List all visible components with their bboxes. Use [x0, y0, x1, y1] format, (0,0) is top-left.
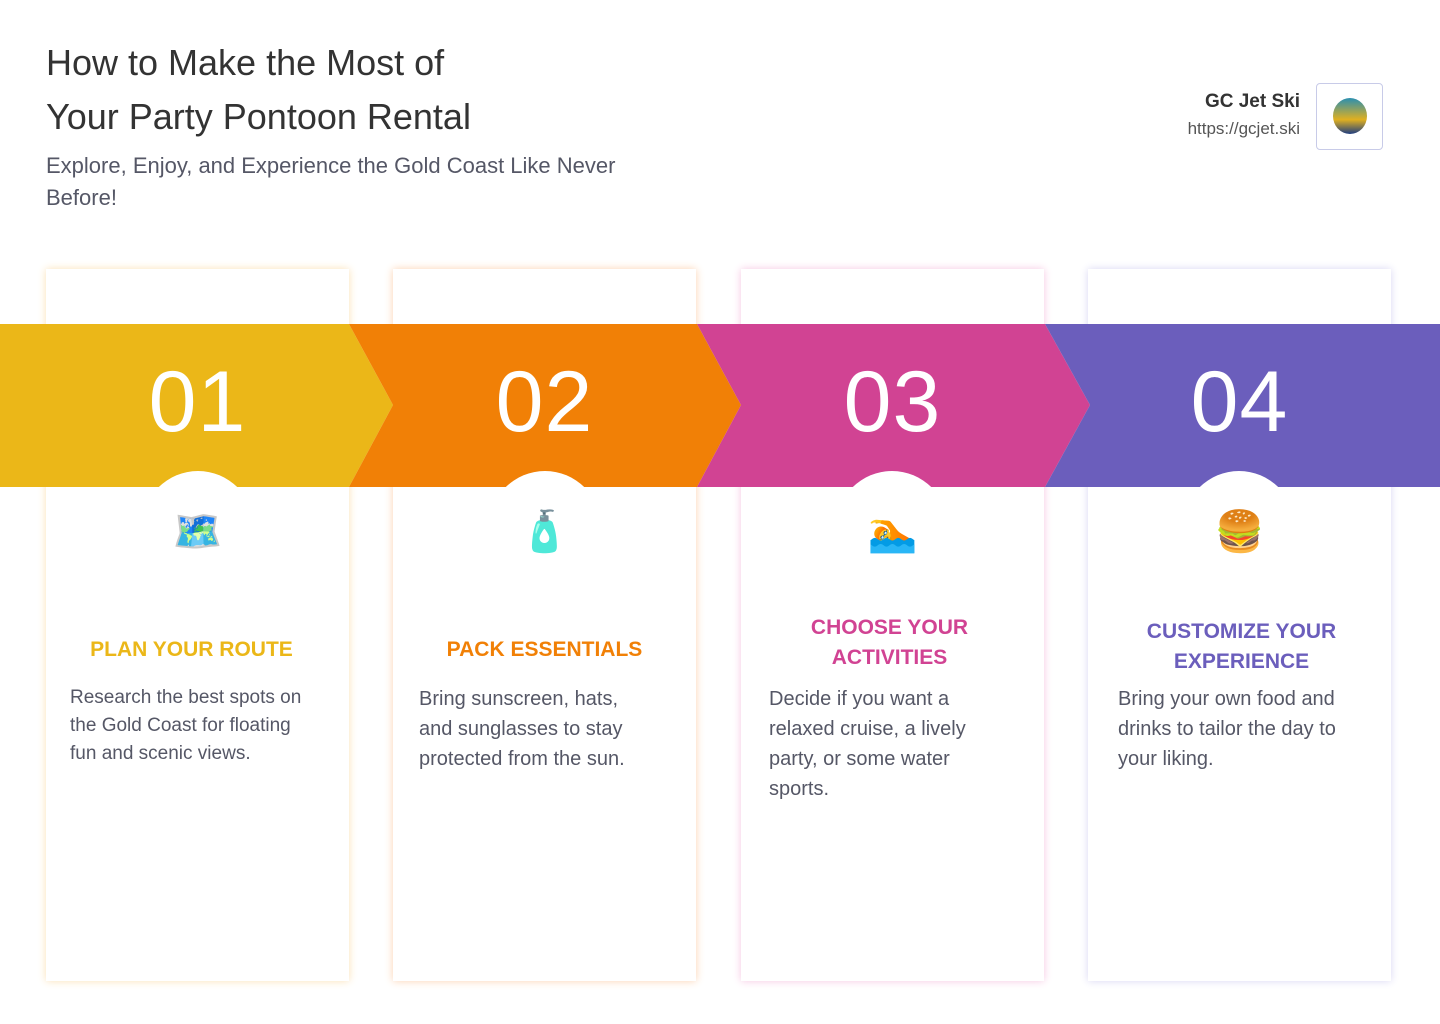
step 4: CUSTOMIZE YOUR — [1147, 620, 1336, 643]
text: Research the best spots on the Gold Coast for floating fun and scenic views. — [70, 687, 301, 764]
logo — [1316, 83, 1383, 150]
card 2 — [393, 269, 696, 981]
step 2: PACK ESSENTIALS — [447, 638, 642, 661]
brand: GC Jet Ski — [1205, 91, 1300, 112]
step 3 — [811, 616, 968, 669]
title — [46, 42, 471, 137]
icons: 🗺️ — [173, 508, 222, 555]
text: 🧴 — [520, 508, 569, 555]
step 1: PLAN YOUR ROUTE — [90, 638, 293, 661]
text: Bring your own food and drinks to tailor the day to your liking. — [1118, 688, 1336, 770]
card 1 — [46, 269, 349, 981]
step 4: EXPERIENCE — [1174, 650, 1309, 673]
text: Decide if you want a relaxed cruise, a lively party, or some water sports. — [769, 688, 966, 800]
text: 04 — [1191, 354, 1288, 450]
text: 🏊 — [868, 508, 917, 555]
card 4 — [1088, 269, 1391, 981]
circles — [142, 471, 254, 583]
text: Bring sunscreen, hats, and sunglasses to stay protected from the sun. — [419, 688, 625, 770]
text: 02 — [496, 354, 593, 450]
step 3: ACTIVITIES — [832, 646, 947, 669]
brand: https://gcjet.ski — [1188, 119, 1300, 138]
brand — [1188, 91, 1300, 138]
title: How to Make the Most of — [46, 42, 444, 83]
numbers: 01 — [149, 354, 246, 450]
step 4 — [1147, 620, 1336, 673]
text: 03 — [844, 354, 941, 450]
subtitle: Explore, Enjoy, and Experience the Gold Coast Like Never Before! — [46, 153, 615, 210]
step 3: CHOOSE YOUR — [811, 616, 968, 639]
text: 🍔 — [1215, 508, 1264, 555]
title: Your Party Pontoon Rental — [46, 96, 471, 137]
card 3 — [741, 269, 1044, 981]
